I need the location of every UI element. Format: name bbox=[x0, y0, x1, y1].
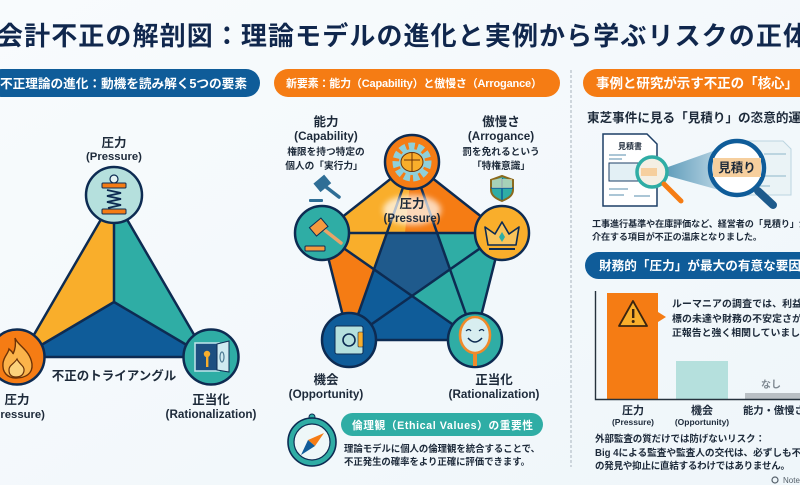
callout: ethical values: 不正発生の確率をより正確に評価できます。 bbox=[344, 456, 530, 467]
panel: cases and research bbox=[583, 69, 800, 472]
text: external audit risk: の発見や抑止に直結するわけではありません。 bbox=[595, 460, 790, 472]
text: Romania survey: 標の未達や財務の不安定さが bbox=[672, 312, 800, 325]
icon: safe bbox=[322, 313, 376, 367]
label: arrogance: 傲慢さ bbox=[482, 114, 520, 129]
chart: fraud pentagon bbox=[322, 162, 502, 340]
label: pressure left bbox=[0, 392, 45, 421]
label: rationalization: 正当化 bbox=[475, 372, 513, 387]
label: pressure centre: 圧力 bbox=[399, 196, 425, 211]
icon: warning triangle bbox=[619, 301, 647, 326]
illustration: estimate document under magnifier: 見積り bbox=[718, 160, 756, 175]
label: triangle name: 不正のトライアングル bbox=[52, 368, 177, 383]
icon: gavel bbox=[295, 206, 349, 260]
icon: open safe with key bbox=[184, 330, 238, 384]
chart: significance bars: (Opportunity) bbox=[675, 417, 729, 427]
chart: significance bars: 圧力 bbox=[622, 403, 644, 417]
icon: crown bbox=[475, 206, 529, 260]
illustration: estimate document under magnifier bbox=[603, 134, 791, 206]
label: capability: 個人の「実行力」 bbox=[285, 159, 363, 172]
label: opportunity bbox=[289, 372, 363, 401]
label: capability: 能力 bbox=[313, 114, 339, 129]
text: estimate explanation: 介在する項目が不正の温床となりました。 bbox=[592, 231, 762, 242]
label: rationalization: (Rationalization) bbox=[449, 388, 540, 401]
icon: brain gear bbox=[385, 135, 439, 189]
callout: ethical values: 倫理観（Ethical Values）の重要性 bbox=[352, 419, 533, 432]
label: opportunity: 機会 bbox=[313, 372, 339, 387]
text: estimate explanation bbox=[592, 218, 800, 242]
label: capability: 権限を持つ特定の bbox=[287, 145, 365, 158]
label: pressure left: 圧力 bbox=[4, 392, 30, 407]
label: pressure top bbox=[86, 135, 142, 163]
label: arrogance: (Arrogance) bbox=[468, 130, 534, 143]
label: opportunity: (Opportunity) bbox=[289, 388, 363, 401]
icon: flame bbox=[0, 330, 44, 384]
illustration: estimate document under magnifier: 見積書 bbox=[618, 141, 642, 151]
label: rationalization left: 正当化 bbox=[192, 392, 230, 407]
icon: spring bbox=[86, 167, 142, 223]
chart: significance bars: 機会 bbox=[691, 403, 713, 417]
label: pressure centre: (Pressure) bbox=[384, 213, 441, 225]
icon: compass bbox=[288, 414, 336, 466]
icon: smiling mirror bbox=[448, 313, 502, 367]
label: capability bbox=[285, 114, 365, 172]
text: Romania survey bbox=[672, 297, 800, 339]
label: rationalization bbox=[449, 372, 540, 401]
heading: new elements pill bbox=[274, 69, 560, 97]
panel: fraud theory evolution bbox=[0, 69, 260, 421]
chart: significance bars: なし bbox=[761, 379, 781, 391]
label: pressure centre bbox=[383, 195, 441, 225]
panel: new elements bbox=[274, 69, 560, 467]
label: arrogance bbox=[462, 114, 540, 172]
title: 会計不正の解剖図：理論モデルの進化と実例から学ぶリスクの正体 bbox=[0, 21, 800, 51]
label: pressure top: (Pressure) bbox=[86, 151, 142, 163]
text: external audit risk bbox=[595, 433, 800, 472]
heading: fraud theory pill bbox=[0, 69, 260, 97]
label: rationalization left bbox=[166, 392, 257, 421]
watermark: Note bbox=[783, 476, 800, 485]
heading: fraud theory pill: 不正理論の進化：動機を読み解く5つの要素 bbox=[0, 76, 247, 91]
callout: ethical values: 理論モデルに個人の倫理観を統合することで、 bbox=[344, 443, 540, 454]
callout: ethical values bbox=[341, 413, 543, 467]
subheading: Toshiba case: 東芝事件に見る「見積り」の恣意的運 bbox=[587, 110, 800, 125]
heading: financial pressure pill: 財務的「圧力」が最大の有意な要因 bbox=[599, 258, 800, 273]
label: arrogance: 罰を免れるという bbox=[462, 145, 540, 158]
text: external audit risk: 外部監査の質だけでは防げないリスク： bbox=[595, 433, 765, 445]
heading: new elements pill: 新要素：能力（Capability）と傲慢さ（Arrogance） bbox=[286, 76, 542, 90]
label: pressure top: 圧力 bbox=[101, 135, 127, 150]
heading: core of fraud pill bbox=[583, 69, 800, 97]
icon: small gavel bbox=[309, 175, 339, 202]
watermark bbox=[772, 476, 800, 485]
icon: shield bbox=[491, 176, 513, 201]
label: arrogance: 「特権意識」 bbox=[472, 159, 530, 172]
text: Romania survey: ルーマニアの調査では、利益 bbox=[672, 297, 800, 310]
divider bbox=[570, 70, 572, 467]
heading: core of fraud pill: 事例と研究が示す不正の「核心」 bbox=[596, 75, 798, 91]
chart: fraud triangle bbox=[21, 197, 207, 357]
heading: financial pressure pill bbox=[585, 252, 800, 279]
chart: significance bars: (Pressure) bbox=[612, 417, 654, 427]
chart: significance bars bbox=[596, 291, 800, 427]
label: rationalization left: (Rationalization) bbox=[166, 408, 257, 421]
label: capability: (Capability) bbox=[294, 130, 358, 143]
